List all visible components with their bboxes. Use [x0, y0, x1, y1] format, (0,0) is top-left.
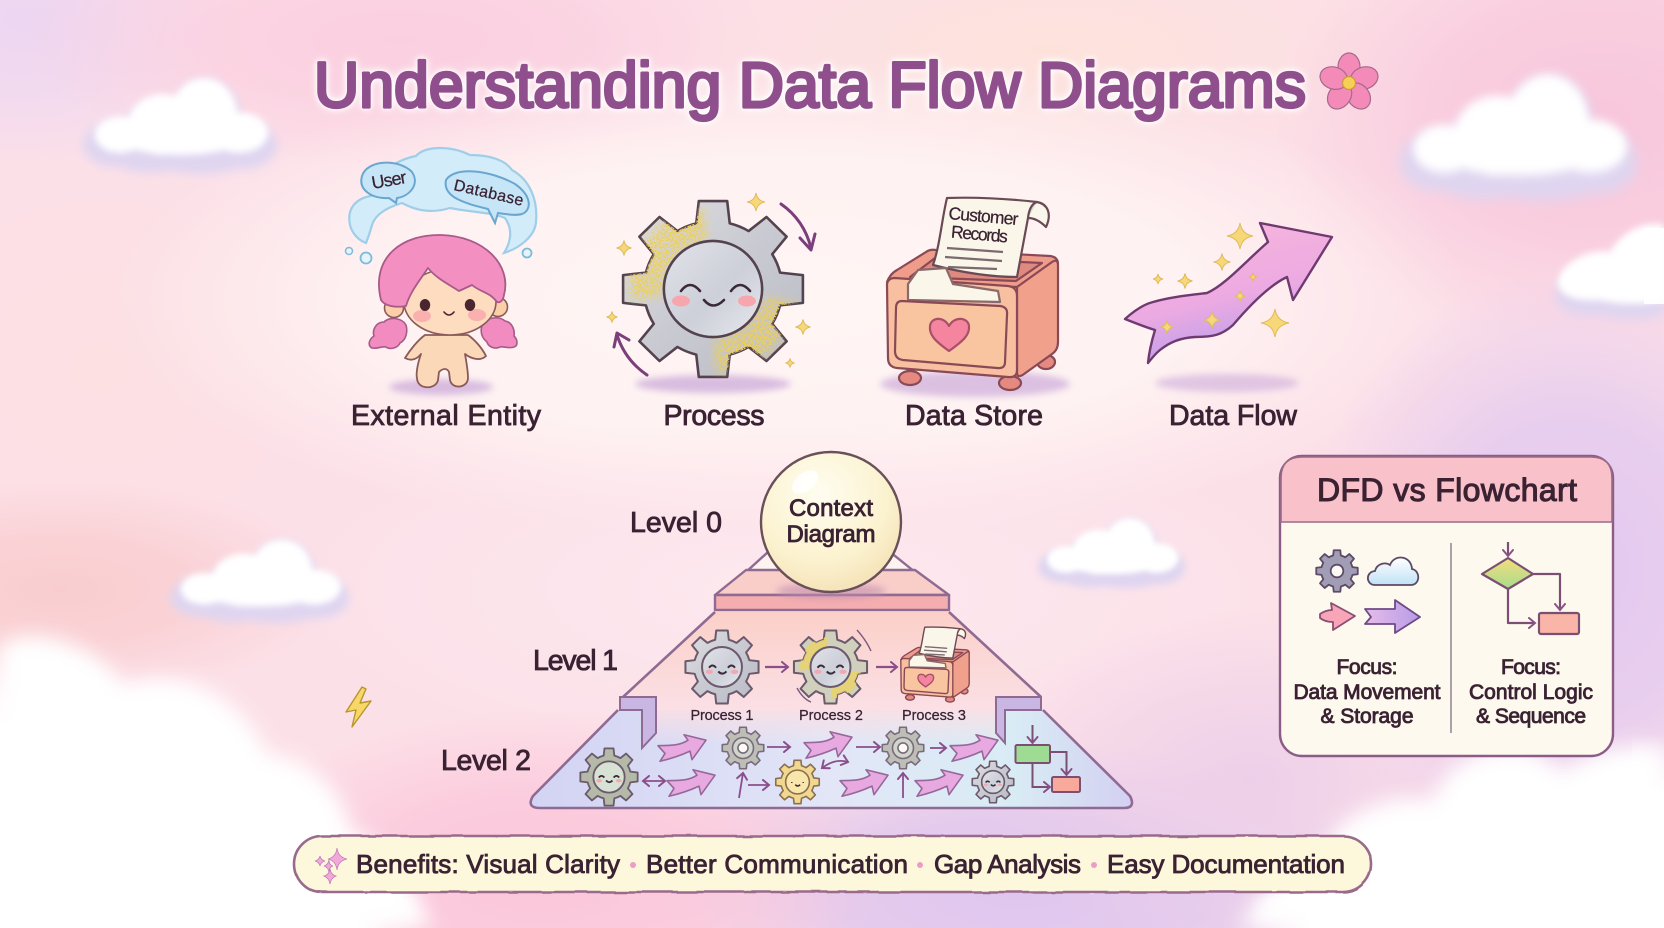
label: External Entity: External Entity	[351, 400, 542, 432]
context diagram sphere	[761, 452, 901, 599]
level 1 data store	[901, 627, 969, 702]
label: User: User	[370, 167, 408, 193]
DFD focus text	[1294, 656, 1441, 728]
cloud mid left	[170, 540, 349, 623]
icon: flower	[1317, 53, 1381, 114]
level 0 pedestal	[715, 570, 949, 610]
face	[404, 269, 496, 335]
flowchart column	[1469, 542, 1593, 728]
benefit: Better Communication: Better Communication	[646, 849, 908, 879]
separator dot	[630, 862, 636, 868]
icon: flowchart	[1482, 542, 1579, 634]
context diagram sphere: Diagram	[786, 521, 876, 548]
pyramid diagram	[531, 452, 1132, 808]
right wall block	[996, 697, 1041, 743]
eyes, cheeks, mouth	[413, 299, 486, 322]
cloud top left	[83, 78, 277, 174]
panel header	[1281, 457, 1612, 522]
panel: DFD vs Flowchart	[1280, 456, 1613, 756]
benefit: Gap Analysis: Gap Analysis	[934, 849, 1081, 879]
level 1 gear: process 2	[794, 630, 871, 704]
flowchart focus text: Control Logic	[1469, 681, 1593, 704]
flowchart focus text	[1469, 656, 1593, 728]
benefit: Visual Clarity: Benefits: Visual Clarity	[356, 849, 620, 879]
DFD focus text: Focus:	[1336, 656, 1398, 679]
icon: pink arrow	[1320, 603, 1355, 630]
rotation arrow bottom left	[614, 333, 647, 375]
level 0 tip triangle	[746, 552, 915, 572]
DFD column	[1294, 550, 1441, 728]
DFD focus text: Data Movement	[1294, 681, 1441, 704]
level 2 flowchart fragment	[1016, 725, 1080, 792]
rotation arrow top right	[781, 204, 815, 250]
gear face	[672, 285, 756, 306]
level 1 gear: process 1	[685, 630, 759, 704]
label: Customer Records: Customer	[948, 203, 1019, 229]
cloud top right	[1399, 74, 1638, 201]
large cloud bottom left	[0, 636, 432, 928]
level 2 small arrows	[643, 747, 946, 798]
level 1 tier	[623, 612, 1041, 745]
label: Customer Records	[948, 203, 1019, 246]
label: Data Flow: Data Flow	[1169, 400, 1297, 432]
body	[405, 335, 486, 387]
icon: data store	[880, 198, 1070, 397]
label: Data Store: Data Store	[905, 400, 1043, 432]
separator dot	[917, 862, 923, 868]
icon: gear	[1316, 550, 1358, 592]
benefits bar	[294, 836, 1371, 892]
label: Level 2: Level 2	[441, 745, 531, 777]
sparkle stars	[1153, 223, 1289, 337]
label: Process 1: Process 1	[690, 708, 754, 724]
thought cloud with bubbles	[346, 148, 536, 264]
ears	[384, 298, 404, 318]
large cloud bottom right	[1240, 735, 1664, 928]
pigtails	[369, 318, 517, 348]
label: Context Diagram: Context	[789, 495, 873, 522]
icon: sparkles	[315, 848, 347, 884]
benefit: Easy Documentation: Easy Documentation	[1107, 849, 1345, 879]
label: Process 3: Process 3	[902, 708, 966, 724]
level 1 arrows	[765, 666, 897, 668]
title: Understanding Data Flow Diagrams	[314, 49, 1306, 121]
label: Level 0: Level 0	[630, 507, 722, 539]
flowchart focus text: & Sequence	[1476, 705, 1586, 728]
level 2 base	[531, 710, 1132, 808]
icon: data flow arrow	[1125, 223, 1332, 392]
icon: external entity character	[346, 148, 536, 395]
icon: cloud	[1368, 558, 1418, 585]
separator dot	[1091, 862, 1097, 868]
label: Database: Database	[452, 177, 525, 210]
cloud right edge	[1556, 224, 1664, 320]
label: Customer Records: Records	[950, 222, 1009, 246]
icon: purple arrow	[1365, 600, 1420, 633]
label: Process 2: Process 2	[799, 708, 863, 724]
icon: lightning bolt	[346, 687, 371, 727]
level 2 gears	[580, 727, 1014, 806]
left wall block	[620, 697, 656, 748]
icon: process gear	[606, 193, 815, 393]
sparkles	[606, 193, 810, 368]
label: Level 1: Level 1	[533, 645, 618, 677]
cloud centre right	[1038, 518, 1185, 588]
hair	[379, 235, 505, 307]
level 2 ribbon arrows	[658, 732, 998, 796]
flowchart focus text: Focus:	[1501, 656, 1561, 679]
label: Process: Process	[664, 400, 764, 432]
DFD focus text: & Storage	[1320, 705, 1414, 728]
panel heading: DFD vs Flowchart	[1317, 472, 1577, 508]
